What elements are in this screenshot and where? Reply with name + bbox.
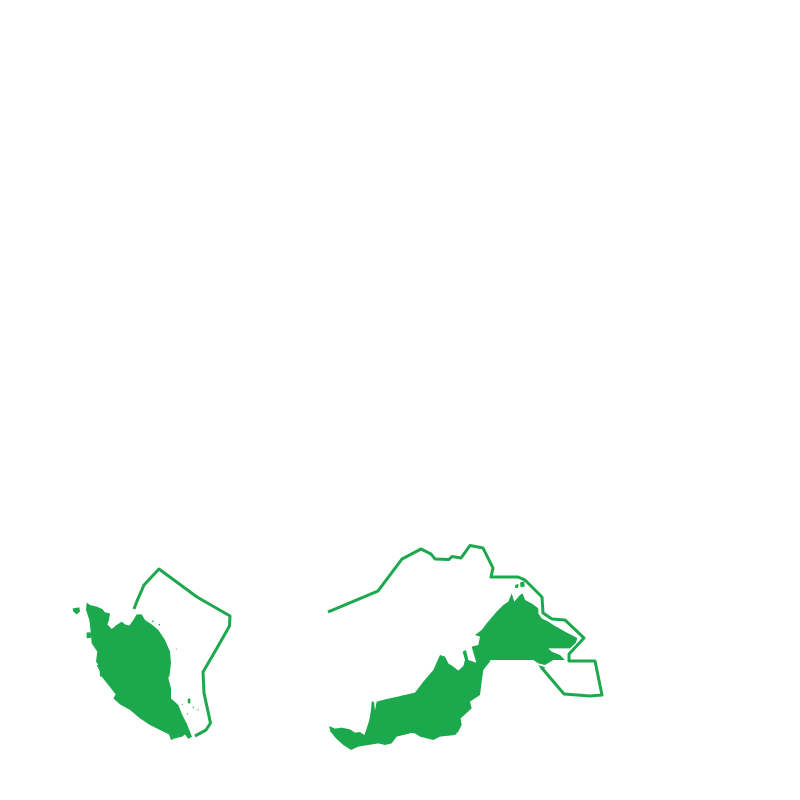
region: Peninsular Malaysia: [73, 569, 230, 740]
maritime boundary: Peninsular Malaysia: [134, 569, 230, 736]
land: Sarawak: [328, 650, 491, 750]
region: East Malaysia: [328, 546, 602, 750]
maritime boundary: East Malaysia: [328, 546, 602, 696]
land: Sabah: [472, 581, 577, 670]
land: Peninsular Malaysia: [73, 602, 199, 740]
